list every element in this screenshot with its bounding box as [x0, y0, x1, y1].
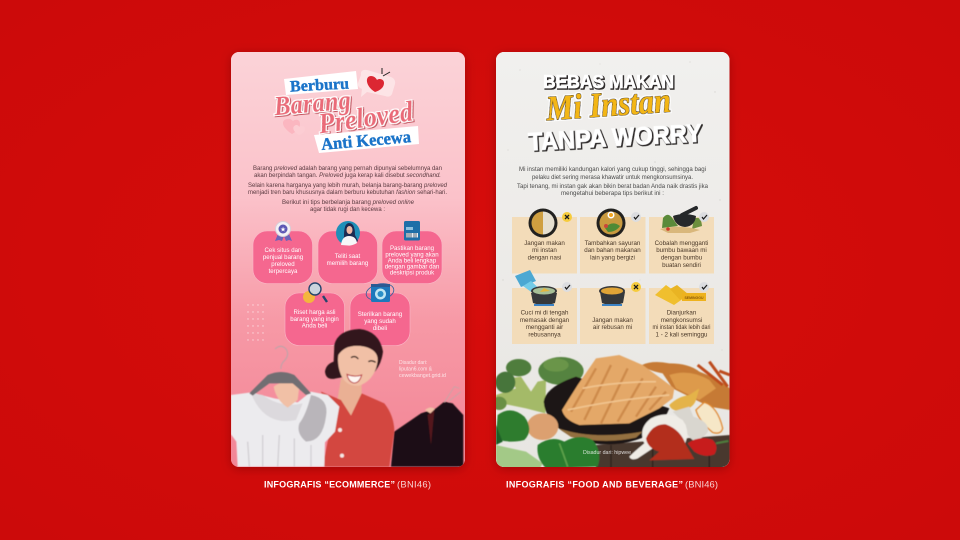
card: pastikan: dengan gambar dan	[385, 264, 439, 270]
icon: heart speech bubble	[358, 68, 395, 97]
text: introduction: Berikut ini tips berbelanja barang preloved online	[282, 199, 415, 206]
caption: food and beverage: (BNI46)	[685, 478, 718, 490]
scoop and chili powder	[629, 415, 687, 459]
badge: check	[699, 282, 709, 292]
icon: small hearts	[283, 118, 300, 134]
photo: food ingredients	[492, 355, 730, 470]
text: introduction: mengetahui beberapa tips berikut ini :	[561, 190, 664, 197]
hanger hook	[275, 346, 288, 369]
card: teliti: memilih barang	[327, 260, 368, 267]
card: bumbu buatan: dengan bumbu	[661, 254, 703, 262]
card: tambahkan sayuran: dan bahan makanan	[584, 247, 641, 254]
card: pastikan: Anda beli lengkap	[388, 258, 437, 264]
hanger	[249, 372, 311, 396]
icon: pot with broth	[599, 286, 625, 306]
broccoli stems	[496, 377, 546, 413]
card: cek situs: terpercaya	[269, 268, 298, 275]
card: jangan makan air rebusan: Jangan makan	[592, 317, 633, 324]
icon: noodles with rice bowl	[528, 208, 558, 238]
icon: noodle blocks and label	[655, 285, 706, 305]
title: Bebas Makan Mi Instan Tanpa Worry: Mi Instan	[544, 81, 672, 128]
card: cuci mi: Cuci mi di tengah	[521, 310, 569, 316]
caption: ecommerce: (BNI46)	[397, 478, 431, 490]
card: bumbu buatan: buatan sendiri	[662, 262, 701, 269]
card: jangan makan dengan nasi: Jangan makan	[524, 240, 565, 247]
card: sterilkan: yang sudah	[364, 318, 396, 325]
red pepper	[688, 438, 716, 456]
text: source note: Disadur dari: hipwee	[583, 450, 631, 456]
card: teliti	[318, 231, 378, 284]
garlic	[673, 407, 708, 440]
card: cuci mi	[512, 288, 577, 344]
text: source note: Disadur dari:	[399, 360, 427, 366]
blouse	[321, 392, 394, 467]
title: Berburu Barang Preloved Anti Kecewa: Anti Kecewa	[320, 127, 412, 154]
card: tambahkan sayuran: Tambahkan sayuran	[585, 240, 641, 247]
badge: check	[631, 212, 641, 222]
broccoli florets	[506, 359, 531, 376]
card: jangan makan dengan nasi: dengan nasi	[528, 254, 561, 262]
chicken	[642, 362, 730, 410]
hand	[274, 382, 299, 408]
card: dianjurkan: mengkonsumsi	[661, 317, 702, 324]
card: sterilkan	[350, 293, 410, 346]
card: cek situs: preloved	[271, 261, 295, 268]
title: Berburu Barang Preloved Anti Kecewa: Berburu	[290, 75, 350, 96]
title: Bebas Makan Mi Instan Tanpa Worry: TANPA WORRY	[527, 119, 703, 157]
icon: pot with water	[515, 270, 557, 306]
title: Bebas Makan Mi Instan Tanpa Worry	[527, 72, 703, 157]
noodle block	[562, 355, 674, 425]
text: introduction: akan berpindah tangan. Preloved juga kerap kali disebut secondhand.	[254, 172, 441, 179]
text: introduction	[248, 165, 448, 213]
card: pastikan: deskripsi produk	[390, 270, 435, 276]
text: introduction: agar tidak rugi dan kecewa :	[310, 206, 385, 213]
card: pastikan: preloved yang akan	[385, 252, 439, 258]
badge: check	[699, 212, 709, 222]
caption: ecommerce: INFOGRAFIS “ECOMMERCE”	[264, 480, 395, 490]
card: teliti: Teliti saat	[335, 253, 361, 260]
text: introduction: menjadi tren baru khususnya dalam berburu kebutuhan fashion sehari-hari.	[248, 189, 447, 196]
card: jangan makan air rebusan: air rebusan mi	[593, 324, 632, 331]
text: source note: liputan6.com &	[399, 366, 433, 372]
card: bumbu buatan	[649, 217, 714, 274]
card: pastikan: Pastikan barang	[390, 245, 434, 252]
icon: magnifier and coin	[303, 283, 327, 303]
black shirt	[391, 402, 463, 467]
icon: woman avatar	[336, 221, 360, 246]
card: pastikan	[382, 231, 442, 284]
decorative dots	[247, 304, 264, 341]
card: dianjurkan: mi instan tidak lebih dari	[652, 324, 710, 331]
panel: food and beverage infographic	[492, 52, 730, 470]
icon: noodles with vegetables bowl	[596, 208, 626, 238]
card: cek situs: Cek situs dan	[265, 247, 301, 254]
icon: product tag	[404, 221, 420, 240]
text: introduction: Barang preloved adalah barang yang pernah dipunyai sebelumnya dan	[253, 165, 443, 172]
onion	[669, 388, 699, 411]
card: cek situs: penjual barang	[263, 254, 303, 261]
card: riset	[285, 293, 344, 346]
badge: cross	[631, 282, 641, 292]
card: jangan makan air rebusan	[580, 288, 646, 344]
badge: check	[562, 282, 572, 292]
icon: award badge	[275, 222, 292, 241]
card: dianjurkan: Dianjurkan	[667, 310, 697, 316]
face	[338, 346, 378, 386]
card: jangan makan dengan nasi	[512, 217, 577, 274]
title: Bebas Makan Mi Instan Tanpa Worry: BEBAS MAKAN	[543, 72, 674, 92]
card: riset: Anda beli	[302, 322, 327, 330]
table	[596, 435, 730, 468]
caption: food and beverage: INFOGRAFIS “FOOD AND BEVERAGE”	[506, 480, 683, 490]
text: introduction: Tapi tenang, mi instan gak akan bikin berat badan Anda naik drastis jika	[517, 183, 709, 190]
badge: cross	[562, 212, 572, 222]
text: introduction: Mi instan memiliki kandungan kalori yang cukup tinggi, sehingga bagi	[519, 166, 706, 173]
white shirt	[231, 392, 339, 467]
icon: award badge: ★	[280, 226, 286, 234]
card: cek situs	[253, 231, 312, 284]
neck	[338, 378, 362, 417]
card: cuci mi: mengganti air	[526, 324, 563, 331]
card: tambahkan sayuran: lain yang bergizi	[590, 254, 635, 262]
egg	[527, 413, 558, 440]
text: introduction: pelaku diet sering merasa khawatir untuk mengkonsumsinya.	[532, 174, 693, 181]
panel: ecommerce infographic	[231, 52, 465, 467]
card: tambahkan sayuran	[580, 217, 646, 274]
card: bumbu buatan: Cobalah mengganti	[655, 240, 708, 247]
text: source note	[399, 360, 446, 379]
card: riset: barang yang ingin	[290, 316, 339, 323]
text: source note: cewekbanget.grid.id	[399, 373, 446, 379]
icon: mortar and herbs	[660, 208, 702, 233]
hair	[325, 329, 383, 379]
card: cuci mi: memasak dengan	[520, 317, 570, 324]
card: sterilkan: dibeli	[373, 325, 387, 332]
card: riset: Riset harga asli	[294, 309, 336, 316]
bowl	[544, 377, 669, 444]
icon: washing machine	[366, 283, 394, 302]
card: cuci mi: rebusannya	[528, 332, 561, 338]
text: introduction: Selain karena harganya yang lebih murah, belanja barang-barang preloved	[248, 182, 448, 189]
icon: noodle blocks and label: SEMINGGU	[684, 296, 704, 300]
card: jangan makan dengan nasi: mi instan	[532, 247, 557, 254]
bok choy	[496, 410, 529, 442]
title: Berburu Barang Preloved Anti Kecewa	[272, 71, 419, 154]
card: sterilkan: Sterilkan barang	[358, 311, 402, 318]
photo: woman with clothes	[231, 329, 463, 467]
text: introduction	[517, 166, 709, 197]
card: bumbu buatan: bumbu bawaan mi	[656, 247, 707, 254]
paper speckles	[502, 61, 723, 353]
card: dianjurkan: 1 - 2 kali seminggu	[656, 332, 708, 338]
title: Berburu Barang Preloved Anti Kecewa: Preloved	[316, 96, 416, 141]
card: dianjurkan	[649, 288, 714, 344]
title: Berburu Barang Preloved Anti Kecewa: Barang	[272, 85, 352, 121]
